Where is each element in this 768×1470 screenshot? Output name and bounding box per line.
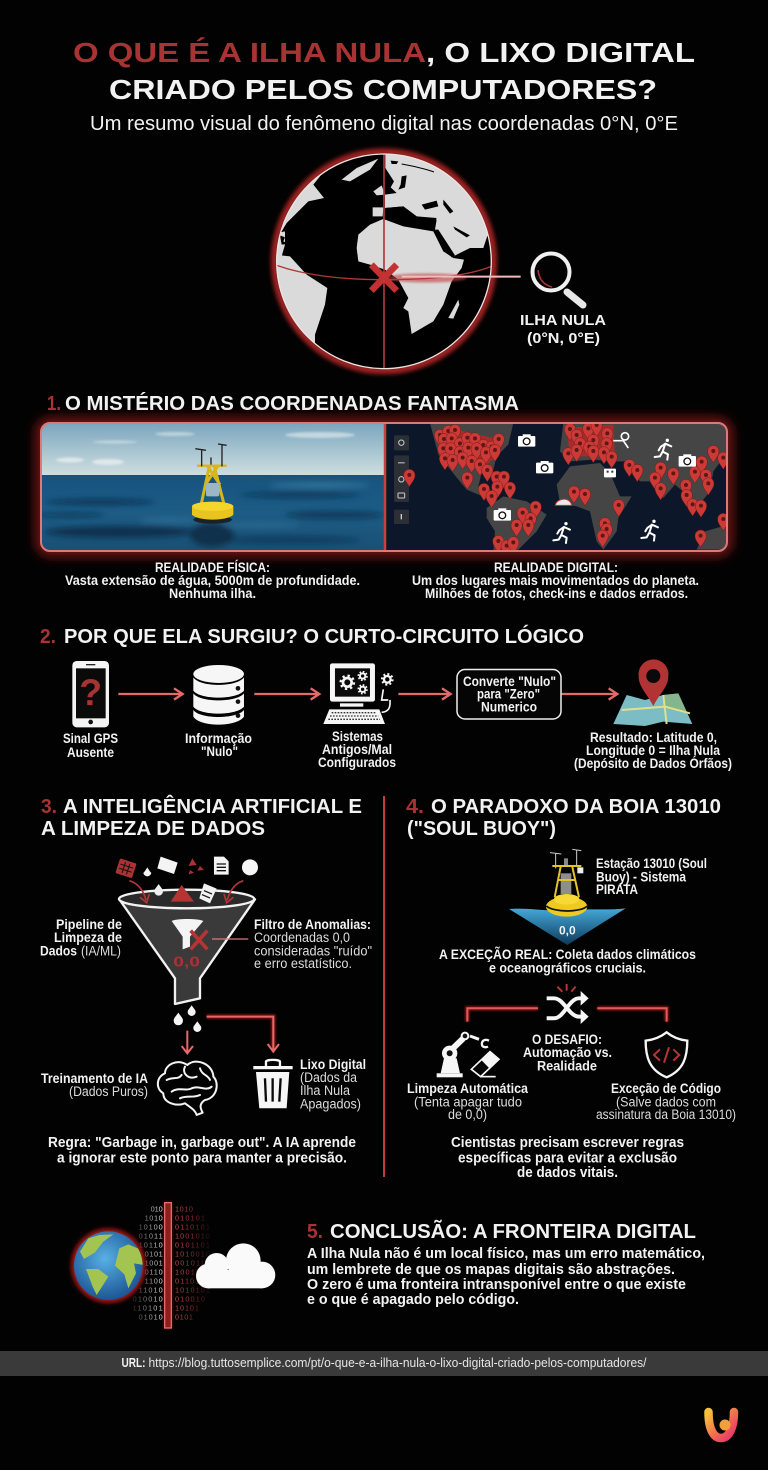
illustration: earth, binary wall and cloud [71, 1202, 275, 1328]
label: automatic cleaning [407, 1081, 528, 1122]
conclusion text: e o que é apagado pelo código. [307, 1291, 519, 1308]
arrow to training [182, 1031, 193, 1053]
binary columns: 0101 [175, 1313, 193, 1322]
label: the challenge: O DESAFIO: [532, 1032, 602, 1047]
label: station 13010 [596, 856, 707, 897]
label: Ilha Nula: ILHA NULA [520, 312, 606, 329]
conclusion text: O zero é uma fronteira intransponível entre o que existe [307, 1276, 686, 1293]
heading: section 1: O MISTÉRIO DAS COORDENADAS FANTASMA [65, 392, 519, 415]
funnel diagram: 0,0 [173, 955, 200, 971]
heading: section 2: 2. [40, 625, 56, 648]
caption: digital reality: Milhões de fotos, check-ins e dados errados. [425, 586, 688, 601]
heading: section 3: 3. [41, 795, 57, 818]
binary columns: 0110100 [175, 1277, 210, 1286]
label: GPS signal: Ausente [67, 745, 114, 760]
binary columns: 01011 [139, 1232, 163, 1241]
funnel diagram [115, 857, 293, 1115]
label: the challenge [523, 1032, 612, 1074]
arrow [118, 688, 183, 700]
process box: Numerico [481, 700, 537, 714]
binary columns: 0101101 [175, 1241, 210, 1250]
label: automatic cleaning: Limpeza Automática [407, 1081, 528, 1096]
heading: section 4 [406, 795, 721, 840]
binary columns: 1010 [145, 1214, 163, 1223]
label: digital trash: Ilha Nula [300, 1083, 350, 1098]
cloud [196, 1243, 275, 1288]
caption: physical reality: Vasta extensão de água, 5000m de profundidade. [65, 573, 360, 588]
connector left [467, 1008, 538, 1022]
globe with null island marker [275, 151, 521, 371]
heading: section 3: A LIMPEZA DE DADOS [41, 817, 265, 840]
text: the real exception: e oceanográficos cruciais. [489, 960, 646, 976]
arrow [254, 688, 319, 700]
binary columns [133, 1205, 210, 1322]
heading: section 2: POR QUE ELA SURGIU? O CURTO-CIRCUITO LÓGICO [64, 624, 584, 648]
incoming arrows [129, 881, 243, 903]
icon: brain [158, 1062, 217, 1115]
label: station 13010: Estação 13010 (Soul [596, 856, 707, 871]
binary columns: 10101 [175, 1304, 199, 1313]
conclusion text [307, 1245, 705, 1308]
label: null information: Informação [185, 731, 252, 746]
output drops [174, 1005, 201, 1032]
flow: logical short circuit [72, 659, 692, 727]
red X marker [371, 265, 397, 291]
earth [71, 1228, 146, 1303]
label: station 13010: PIRATA [596, 882, 638, 897]
binary columns: 0110 [145, 1268, 163, 1277]
text: scientists: de dados vitais. [517, 1164, 618, 1181]
label: the challenge: Realidade [537, 1058, 597, 1074]
icon: old computer with gears [323, 663, 393, 724]
section 4 graphics [437, 849, 687, 1077]
label: digital trash: Lixo Digital [300, 1057, 366, 1072]
label: result [574, 730, 732, 771]
pins: north america [404, 424, 516, 508]
binary columns: 010 [151, 1205, 163, 1214]
binary columns: 1001010 [175, 1232, 210, 1241]
funnel body [119, 899, 255, 1004]
label: old systems: Sistemas [332, 729, 383, 744]
subtitle: Um resumo visual do fenômeno digital nas coordenadas 0°N, 0°E [90, 113, 678, 135]
label: old systems: Configurados [318, 755, 396, 770]
binary columns: 1010010 [175, 1250, 210, 1259]
binary columns: 10110 [139, 1241, 163, 1250]
label: anomaly filter: Coordenadas 0,0 [254, 930, 350, 945]
icon: phone [72, 661, 109, 727]
label: result: Longitude 0 = Ilha Nula [586, 743, 720, 758]
label: the challenge: Automação vs. [523, 1045, 612, 1060]
label: pipeline [40, 917, 122, 958]
label: code exception: Exceção de Código [611, 1081, 721, 1096]
heading: section 4: 4. [406, 795, 424, 818]
label: result: Resultado: Latitude 0, [590, 730, 717, 745]
url bar: URL: [122, 1355, 146, 1370]
caption: physical reality: REALIDADE FÍSICA: [155, 560, 270, 575]
arrow to trash [207, 1017, 279, 1052]
label: AI training: Treinamento de IA [41, 1071, 148, 1086]
heading: section 5: CONCLUSÃO: A FRONTEIRA DIGITAL [330, 1220, 696, 1243]
binary columns: 0101 [145, 1250, 163, 1259]
label: automatic cleaning: (Tenta apagar tudo [414, 1094, 522, 1110]
label: station 13010: Buoy) - Sistema [596, 870, 686, 884]
text: scientists: específicas para evitar a exclusão [458, 1150, 677, 1166]
binary columns: 1010101 [175, 1286, 210, 1295]
world map with pins [385, 419, 729, 557]
text: scientists: Cientistas precisam escrever regras [451, 1134, 684, 1151]
magnifying glass icon [532, 254, 583, 305]
photo: buoy at sea [35, 423, 385, 551]
text: scientists [451, 1134, 684, 1181]
icon: robot arm and eraser [437, 1033, 499, 1077]
caption: physical reality [65, 560, 360, 601]
icon: phone: ? [79, 671, 102, 713]
icon: database [193, 665, 244, 725]
binary columns: 1001011 [175, 1268, 210, 1277]
caption: digital reality [412, 560, 699, 601]
label: old systems [318, 729, 396, 770]
conclusion text: um lembrete de que os mapas digitais são abstrações. [307, 1261, 675, 1278]
binary columns: 110101 [133, 1304, 163, 1313]
label: pipeline: Limpeza de [54, 930, 122, 945]
rule text: a ignorar este ponto para manter a precisão. [57, 1150, 347, 1166]
process box: para "Zero" [477, 686, 540, 702]
label: null information [185, 731, 252, 759]
title [73, 37, 695, 105]
icon: shield with code [646, 1032, 687, 1077]
conclusion text: A Ilha Nula não é um local físico, mas um erro matemático, [307, 1245, 705, 1262]
binary columns: 010010 [175, 1295, 205, 1304]
process box [457, 670, 561, 719]
small filter icon with X [172, 919, 207, 949]
pins: europe and asia [563, 419, 729, 547]
caption: digital reality: Um dos lugares mais movimentados do planeta. [412, 573, 699, 588]
binary columns: 01010 [139, 1313, 163, 1322]
binary columns: 1010 [175, 1205, 193, 1214]
text: the real exception: A EXCEÇÃO REAL: Coleta dados climáticos [439, 947, 696, 962]
text: the real exception [439, 947, 696, 976]
caption: digital reality: REALIDADE DIGITAL: [494, 560, 618, 575]
binary columns: 0110101 [175, 1223, 210, 1232]
binary columns: 1100 [145, 1277, 163, 1286]
vertical divider [382, 796, 386, 1177]
label: code exception: (Salve dados com [616, 1094, 716, 1110]
connector right [597, 1008, 667, 1022]
red wall [164, 1202, 172, 1328]
label: old systems: Antigos/Mal [322, 742, 392, 757]
label: Ilha Nula [520, 312, 606, 347]
icon: trash can [253, 1060, 293, 1108]
icon: map with pin [613, 659, 692, 726]
label: automatic cleaning: de 0,0) [448, 1107, 487, 1122]
process box: Converte "Nulo" [463, 674, 556, 689]
title: CRIADO PELOS COMPUTADORES? [109, 74, 657, 105]
label: anomaly filter: e erro estatístico. [254, 956, 352, 971]
title: O QUE É A ILHA NULA [73, 37, 426, 68]
heading: section 3 [41, 794, 362, 840]
label: digital trash [300, 1057, 366, 1112]
label: GPS signal: Sinal GPS [63, 731, 118, 746]
label: Ilha Nula: (0°N, 0°E) [527, 330, 600, 347]
heading: section 3: A INTELIGÊNCIA ARTIFICIAL E [63, 794, 362, 818]
label: pipeline: Dados [40, 944, 77, 958]
label: digital trash: (Dados da [300, 1070, 357, 1085]
data items falling [115, 857, 258, 878]
icons: cameras and runners [494, 433, 696, 543]
panel: physical vs digital reality [35, 419, 729, 557]
url bar [0, 1351, 768, 1376]
icon: buoy on water [509, 849, 626, 945]
heading: section 1: 1. [47, 392, 61, 415]
icon: buoy on water: 0,0 [559, 924, 576, 938]
logo [708, 1412, 734, 1438]
label: pipeline: (IA/ML) [81, 944, 121, 958]
binary columns: 1001 [145, 1259, 163, 1268]
label: null information: "Nulo" [201, 744, 238, 759]
arrow [398, 688, 451, 700]
label: GPS signal [63, 731, 118, 760]
heading: section 5: 5. [307, 1220, 323, 1243]
binary columns: 010010 [133, 1295, 163, 1304]
pins: south america and africa [493, 486, 624, 557]
label: code exception [596, 1081, 736, 1122]
label: result: (Depósito de Dados Órfãos) [574, 756, 732, 771]
url bar: https://blog.tuttosemplice.com/pt/o-que-e-a-ilha-nula-o-lixo-digital-criado-pelos-computadores/ [148, 1355, 647, 1370]
label: anomaly filter [254, 917, 372, 971]
title: , O LIXO DIGITAL [426, 37, 695, 68]
heading: section 4: ("SOUL BUOY") [407, 817, 556, 840]
label: digital trash: Apagados) [300, 1096, 361, 1112]
label: AI training [41, 1071, 148, 1099]
rule text [48, 1134, 356, 1166]
binary columns: 0010110 [175, 1259, 210, 1268]
caption: physical reality: Nenhuma ilha. [169, 586, 256, 601]
label: pipeline: Pipeline de [56, 917, 122, 932]
label: anomaly filter: Filtro de Anomalias: [254, 917, 371, 932]
rule text: Regra: "Garbage in, garbage out". A IA aprende [48, 1134, 356, 1151]
binary columns: 010101 [175, 1214, 205, 1223]
binary columns: 11010 [139, 1286, 163, 1295]
map toolbar [394, 435, 409, 524]
label: anomaly filter: consideradas "ruído" [254, 944, 372, 958]
label: AI training: (Dados Puros) [69, 1084, 148, 1099]
heading: section 4: O PARADOXO DA BOIA 13010 [431, 795, 721, 818]
label: code exception: assinatura da Boia 13010) [596, 1107, 736, 1122]
icon: shuffle conflict [547, 984, 589, 1024]
arrow [562, 688, 617, 700]
binary columns: 10100 [139, 1223, 163, 1232]
